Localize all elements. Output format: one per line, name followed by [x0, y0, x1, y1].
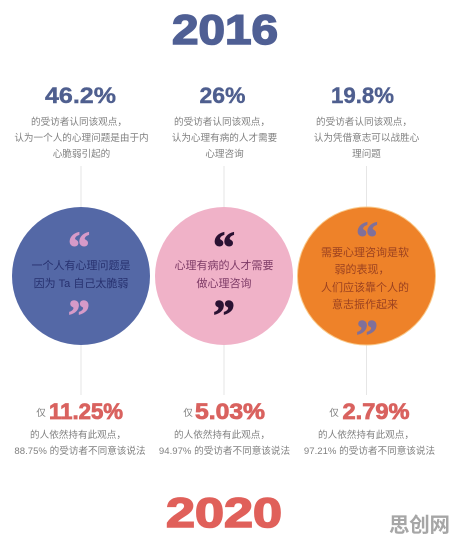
watermark: 思创网 [389, 514, 450, 537]
label: 仅: 仅 [329, 407, 339, 419]
panel: 2016 statistic 2 [172, 83, 278, 160]
panel: 2016 statistic 1 [14, 83, 149, 160]
quote text: 做心理咨询 [196, 276, 252, 290]
description: statistic 1: 的人依然持有此观点， [30, 429, 126, 441]
panel: orange quote circle [298, 207, 436, 360]
icon: opening quote: “ [356, 213, 378, 262]
description: statistic 2: 94.97% 的受访者不同意该说法 [159, 445, 290, 457]
panel: 2020 statistic 3 [304, 399, 435, 457]
description: statistic 2: 的人依然持有此观点， [174, 429, 270, 441]
quote text: 因为 Ta 自己太脆弱 [34, 276, 128, 290]
description: statistic 1: 88.75% 的受访者不同意该说法 [14, 445, 146, 457]
description: statistic 2: 认为心理有病的人才需要 [172, 132, 278, 144]
panel: 2020 statistic 1 [14, 399, 146, 457]
stat: 5.03%: 5.03% [195, 399, 265, 424]
description: statistic 3: 认为凭借意志可以战胜心 [314, 132, 420, 144]
quote text: 弱的表现， [334, 262, 390, 276]
stat: 19.8%: 19.8% [331, 83, 394, 108]
label: 仅: 仅 [183, 407, 193, 419]
label: 仅: 仅 [36, 407, 46, 419]
icon: closing quote: ” [68, 291, 90, 340]
description: statistic 1: 认为一个人的心理问题是由于内 [14, 132, 149, 144]
quote text: 心理有病的人才需要 [174, 258, 274, 272]
icon: opening quote: “ [68, 223, 90, 272]
title: 2016: 2016 [172, 6, 278, 53]
quote text: 人们应该靠个人的 [321, 280, 409, 294]
description: statistic 2: 心理咨询 [205, 148, 244, 160]
icon: closing quote: ” [356, 311, 378, 360]
quote text: 意志振作起来 [332, 297, 398, 311]
panel: 2020 statistic 2 [159, 399, 290, 457]
stat: 2.79%: 2.79% [342, 399, 410, 424]
icon: closing quote: ” [213, 291, 235, 340]
title: 2020: 2020 [166, 489, 282, 536]
description: statistic 1: 的受访者认同该观点， [31, 116, 127, 128]
panel: 2016 statistic 3 [314, 83, 420, 160]
description: statistic 3: 97.21% 的受访者不同意该说法 [304, 445, 435, 457]
panel: pink quote circle [155, 207, 293, 345]
panel: blue quote circle [12, 207, 150, 345]
stat: 26%: 26% [200, 83, 246, 108]
quote text: 一个人有心理问题是 [32, 258, 130, 272]
description: statistic 3: 的人依然持有此观点， [318, 429, 414, 441]
description: statistic 3: 的受访者认同该观点， [316, 116, 412, 128]
stat: 11.25%: 11.25% [49, 399, 123, 424]
description: statistic 3: 理问题 [352, 148, 381, 160]
description: statistic 1: 心脆弱引起的 [53, 148, 110, 160]
stat: 46.2%: 46.2% [45, 83, 116, 108]
description: statistic 2: 的受访者认同该观点， [174, 116, 270, 128]
icon: opening quote: “ [213, 223, 235, 272]
quote text: 需要心理咨询是软 [321, 245, 409, 259]
